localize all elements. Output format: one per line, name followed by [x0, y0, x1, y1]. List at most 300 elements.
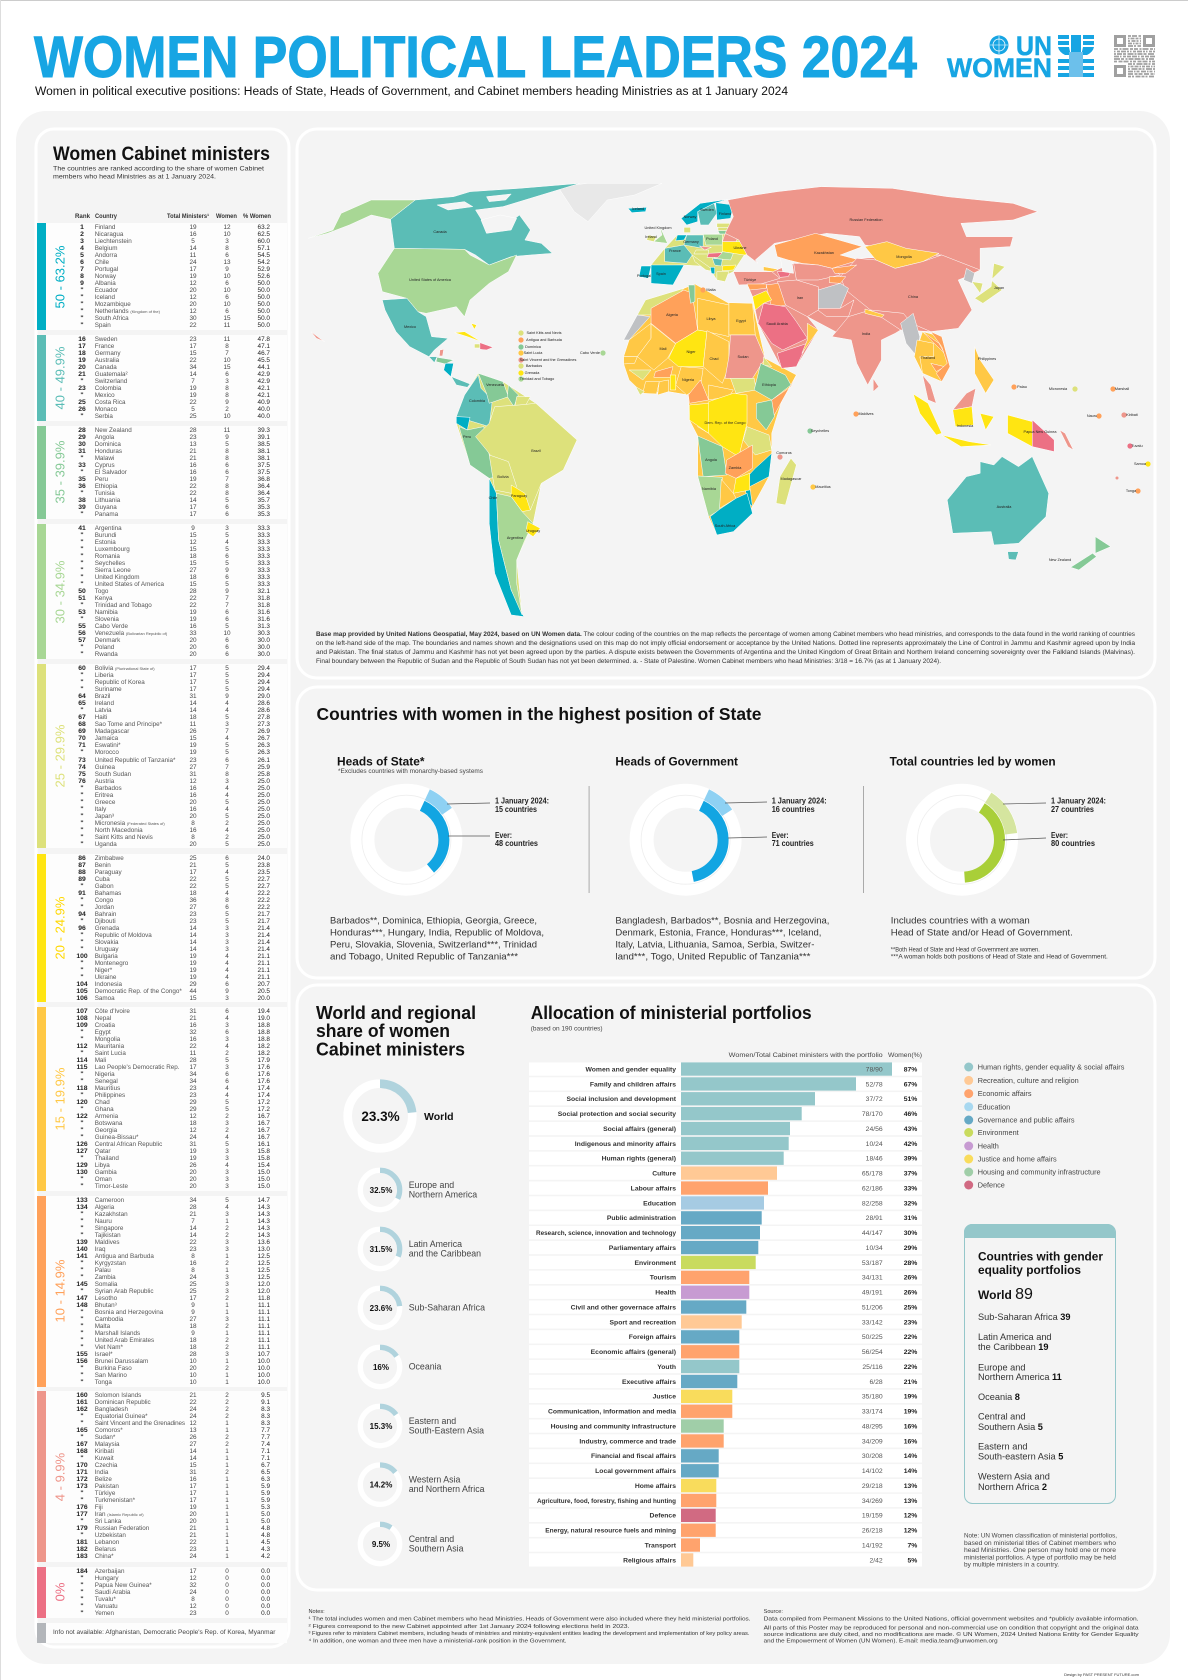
table group: 20 - 24.9%: 21.4 [258, 946, 270, 953]
table group: 15 - 19.9%: 17.6 [258, 1064, 270, 1071]
table group: 50 - 63.2%: Netherlands (Kingdom of the) [95, 308, 160, 315]
table group: 35 - 39.9%: 38.1 [258, 448, 270, 455]
table group: 25 - 29.9%: 29.4 [258, 686, 270, 693]
table group: 15 - 19.9%: 129 [76, 1162, 88, 1169]
table group: 10 - 14.9%: Marshall Islands [95, 1330, 140, 1337]
table group: 10 - 14.9%: 25 [189, 1288, 197, 1295]
table group: 4 - 9.9%: " [80, 1518, 84, 1525]
table group: 25 - 29.9%: 31 [189, 693, 197, 700]
table group: 40 - 49.9%: " [80, 392, 84, 399]
donut: Central and Southern Asia [360, 1524, 464, 1564]
table group: 4 - 9.9%: " [80, 1413, 84, 1420]
table group: 35 - 39.9%: New Zealand [95, 427, 132, 434]
table group: 15 - 19.9%: 6 [225, 1008, 229, 1015]
bar chart: ministerial portfolios: 33/142 [862, 1319, 883, 1326]
map: country labels: Ireland [645, 235, 657, 239]
table group: 10 - 14.9%: 145 [76, 1281, 88, 1288]
bar chart: ministerial portfolios: Health [655, 1290, 676, 1297]
table group: 10 - 14.9%: 11.1 [258, 1309, 270, 1316]
callout: countries with gender equality portfolios: Northern Africa 2 [978, 1482, 1047, 1492]
bar chart: ministerial portfolios: 42% [904, 1141, 917, 1148]
table group: 25 - 29.9%: 3 [225, 778, 229, 785]
table group: 4 - 9.9%: 1 [225, 1476, 229, 1483]
table group: 40 - 49.9%: 14 [189, 371, 197, 378]
table group: 25 - 29.9%: 9 [225, 693, 229, 700]
table group: 20 - 24.9%: 23.5 [258, 869, 270, 876]
table group: 25 - 29.9%: 4 [225, 707, 229, 714]
table group: 25 - 29.9%: Brazil [95, 693, 110, 700]
table group: 0%: 0.0 [261, 1603, 270, 1610]
table group: 40 - 49.9%: Germany [95, 350, 121, 357]
table group: 15 - 19.9%: " [80, 1120, 84, 1127]
table group: 20 - 24.9%: 20.0 [258, 995, 270, 1002]
table group: 25 - 29.9%: Barbados [95, 785, 122, 792]
map: country labels: Ukraine [733, 246, 747, 250]
table group: 4 - 9.9%: 19 [189, 1504, 197, 1511]
bar chart: ministerial portfolios: Civil and other governace affairs [571, 1304, 676, 1311]
table group: 15 - 19.9%: 2 [225, 1113, 229, 1120]
bar chart: ministerial portfolios: 22% [904, 1349, 917, 1356]
bar chart: ministerial portfolios: Energy, natural resource fuels and mining [545, 1528, 676, 1535]
bar chart: ministerial portfolios: Culture [652, 1170, 676, 1178]
table group: 25 - 29.9%: Sao Tome and Principe* [95, 721, 162, 728]
table group: 30 - 34.9%: " [80, 574, 84, 581]
table group: 25 - 29.9%: 71 [78, 742, 86, 749]
table group: 30 - 34.9%: 30.0 [258, 651, 270, 658]
table group: 15 - 19.9%: 15.0 [258, 1176, 270, 1183]
bar chart: ministerial portfolios: Justice [653, 1394, 676, 1401]
table group: 15 - 19.9%: 5 [225, 1057, 229, 1064]
table group: 30 - 34.9%: 53 [78, 609, 86, 616]
table group: 0%: Tuvalu* [95, 1596, 116, 1603]
table group: 20 - 24.9%: 4 [225, 869, 229, 876]
table group: 4 - 9.9%: 9.5 [261, 1392, 270, 1399]
table group: 25 - 29.9%: 5 [225, 841, 229, 848]
table group: 15 - 19.9%: Egypt [95, 1029, 111, 1036]
table group: 20 - 24.9%: 3 [225, 995, 229, 1002]
bar chart: ministerial portfolios: 78/170 [862, 1111, 883, 1118]
table group: 25 - 29.9%: 25.0 [258, 820, 270, 827]
table group: 50 - 63.2%: 10 [223, 287, 231, 294]
table group: 0%: Vanuatu [95, 1603, 118, 1610]
map: country labels: Portugal [637, 274, 651, 278]
table group: 20 - 24.9%: " [80, 918, 84, 925]
table group: 40 - 49.9%: 34 [189, 364, 197, 371]
table group: 10 - 14.9%: Zambia [95, 1274, 116, 1281]
bar chart: ministerial portfolios: 46% [904, 1111, 917, 1118]
table group: 30 - 34.9%: 30.0 [258, 637, 270, 644]
table group: 25 - 29.9%: 16 [189, 792, 197, 799]
table group: 4 - 9.9%: " [80, 1420, 84, 1427]
table group: 4 - 9.9%: 5.9 [261, 1490, 270, 1497]
map: country labels: Dem. Rep. of the Congo [705, 421, 745, 425]
QR code [1114, 35, 1155, 77]
table group: 20 - 24.9%: 88 [78, 869, 86, 876]
table group: 25 - 29.9%: 29.4 [258, 672, 270, 679]
table group: 35 - 39.9%: 16 [189, 469, 197, 476]
table group: 50 - 63.2%: 52.6 [258, 273, 270, 280]
table group: 4 - 9.9%: 24 [189, 1406, 197, 1413]
bar chart: ministerial portfolios: 26/218 [862, 1528, 883, 1535]
table group: 10 - 14.9%: 28 [189, 1204, 197, 1211]
bar chart: ministerial portfolios: 87% [904, 1066, 917, 1073]
table group: 20 - 24.9%: 3 [225, 946, 229, 953]
table group: 4 - 9.9%: 7.4 [261, 1441, 270, 1448]
table group: 35 - 39.9%: 31 [78, 448, 86, 455]
table group: 15 - 19.9%: 22 [189, 1043, 197, 1050]
table group: 4 - 9.9%: 1 [225, 1553, 229, 1560]
table group: 40 - 49.9%: Australia [95, 357, 119, 364]
callout: countries with gender equality portfolios: Northern America 11 [978, 1372, 1062, 1382]
table group: 25 - 29.9%: Bolivia (Plurinational State of) [95, 665, 155, 672]
table group: 10 - 14.9%: 12.0 [258, 1281, 270, 1288]
table group: 40 - 49.9%: 7 [191, 378, 195, 385]
table group: 20 - 24.9%: Slovakia [95, 939, 118, 946]
table group: 35 - 39.9%: 38 [78, 497, 86, 504]
map: country labels: Kazakhstan [814, 251, 834, 255]
table group: 25 - 29.9%: 8 [191, 834, 195, 841]
table group: 4 - 9.9%: 20 [189, 1511, 197, 1518]
table group: 4 - 9.9%: 6.7 [261, 1462, 270, 1469]
table group: 20 - 24.9%: 4 [225, 960, 229, 967]
map: country labels: Namibia [702, 487, 717, 491]
table group: 10 - 14.9%: Cambodia [95, 1316, 123, 1323]
table group: 0%: 0.0 [261, 1589, 270, 1596]
table group: 15 - 19.9%: 18.8 [258, 1022, 270, 1029]
panel: total countries led by women: Total countries led by women [890, 757, 1056, 769]
donut: Central and Southern Asia: 9.5% [372, 1540, 390, 1549]
table group: 20 - 24.9%: 105 [76, 988, 88, 995]
table group: 15 - 19.9%: Armenia [95, 1113, 118, 1120]
bar chart: ministerial portfolios: 43% [904, 1126, 917, 1133]
table group: 10 - 14.9%: Bosnia and Herzegovina [95, 1309, 163, 1316]
bar chart: ministerial portfolios: 14/102 [862, 1468, 883, 1475]
heading: world and regional share: Cabinet ministers [316, 1038, 465, 1060]
table group: 25 - 29.9%: Uganda [95, 841, 117, 848]
table group: 30 - 34.9%: 55 [78, 623, 86, 630]
table group: 30 - 34.9%: 28 [189, 588, 197, 595]
table group: 35 - 39.9%: Dominica [95, 441, 121, 448]
table group: 30 - 34.9%: 31.6 [258, 609, 270, 616]
table group: 4 - 9.9%: 4.8 [261, 1532, 270, 1539]
table group: 4 - 9.9%: 7.1 [261, 1448, 270, 1455]
table group: 35 - 39.9%: Cyprus [95, 462, 115, 469]
table group: 15 - 19.9%: 6 [225, 1078, 229, 1085]
table group: 25 - 29.9%: Liberia [95, 672, 114, 679]
bar chart: ministerial portfolios: 34/131 [862, 1275, 883, 1282]
table group: 15 - 19.9%: Timor-Leste [95, 1183, 128, 1190]
table group: 20 - 24.9%: 6 [225, 855, 229, 862]
table group: 15 - 19.9%: Lao People's Democratic Rep. [95, 1064, 180, 1071]
table group: 20 - 24.9%: 20.5 [258, 988, 270, 995]
table group: 15 - 19.9%: 20 [189, 1183, 197, 1190]
table group: 30 - 34.9%: 9 [225, 567, 229, 574]
table group: 15 - 19.9%: 11 [190, 1050, 196, 1057]
table group: 25 - 29.9%: 2 [225, 820, 229, 827]
callout: countries with gender equality portfolios: equality portfolios [978, 1263, 1081, 1277]
table group: 4 - 9.9%: 2 [225, 1469, 229, 1476]
table group: 30 - 34.9%: 57 [78, 637, 86, 644]
table group: 10 - 14.9%: " [80, 1372, 84, 1379]
map: country labels: Mauritius [815, 485, 831, 489]
table group: 50 - 63.2%: 50.0 [258, 280, 270, 287]
table group: 15 - 19.9%: 32 [189, 1029, 197, 1036]
table group: 4 - 9.9%: 21 [189, 1532, 197, 1539]
table group: 50 - 63.2%: 3 [225, 238, 229, 245]
table group: 30 - 34.9%: 6 [225, 553, 229, 560]
table group: 15 - 19.9%: 2 [225, 1050, 229, 1057]
bar chart: ministerial portfolios: Public administration [607, 1215, 676, 1222]
table group: 10 - 14.9%: Maldives [95, 1239, 120, 1246]
table group: 15 - 19.9%: 17 [189, 1064, 197, 1071]
table group: 10 - 14.9%: 140 [76, 1246, 88, 1253]
table group: 25 - 29.9%: 17 [189, 686, 197, 693]
table group: 15 - 19.9%: 18.2 [258, 1050, 270, 1057]
bar chart: ministerial portfolios: Tourism [650, 1275, 676, 1282]
map: country labels: Colombia [469, 399, 486, 403]
table group: 35 - 39.9%: " [80, 469, 84, 476]
table group: 20 - 24.9%: 87 [78, 862, 86, 869]
table group: 4 - 9.9%: 5.9 [261, 1483, 270, 1490]
panel: total countries led by women: Includes countries with a woman [891, 915, 1030, 925]
table group: 30 - 34.9%: " [80, 553, 84, 560]
table group: 15 - 19.9%: 16.7 [258, 1113, 270, 1120]
table group: 50 - 63.2%: 11 [190, 252, 196, 259]
map: country labels: India [862, 332, 871, 336]
table group: 4 - 9.9%: 16 [189, 1476, 197, 1483]
map: country labels: Chad [709, 357, 719, 361]
panel: heads of government [615, 757, 829, 961]
table group: 25 - 29.9%: Eritrea [95, 792, 113, 799]
table group: 25 - 29.9%: South Sudan [95, 771, 131, 778]
table group: 4 - 9.9%: 17 [189, 1497, 197, 1504]
table group: 25 - 29.9%: " [80, 749, 84, 756]
bar chart: ministerial portfolios: Youth [657, 1364, 676, 1371]
table group: 35 - 39.9%: 11 [224, 427, 230, 434]
table group: 4 - 9.9%: Fiji [95, 1504, 103, 1511]
table group: 30 - 34.9%: 6 [225, 651, 229, 658]
table group: 50 - 63.2%: " [80, 301, 84, 308]
table group: 25 - 29.9%: 4 [225, 735, 229, 742]
table group: 25 - 29.9%: 26.3 [258, 749, 270, 756]
table group: 30 - 34.9%: 7 [225, 595, 229, 602]
donut: Europe and Northern America: 32.5% [370, 1186, 392, 1195]
table group: 10 - 14.9%: 11.1 [258, 1344, 270, 1351]
donut: Europe and Northern America: Europe and [409, 1180, 454, 1190]
table group: 4 - 9.9%: 2 [225, 1399, 229, 1406]
table group: 10 - 14.9%: 5 [225, 1197, 229, 1204]
table group: 4 - 9.9%: 183 [76, 1553, 88, 1560]
table group: 4 - 9.9%: China* [95, 1553, 114, 1560]
table group: 35 - 39.9%: 8 [225, 483, 229, 490]
table group: 20 - 24.9%: Congo [95, 897, 113, 904]
table group: 4 - 9.9%: 14 [189, 1448, 197, 1455]
bar chart: ministerial portfolios: 48/295 [862, 1423, 883, 1430]
bar chart: ministerial portfolios: 25/116 [862, 1364, 883, 1371]
bar chart: ministerial portfolios: Industry, commerce and trade [579, 1438, 676, 1445]
table group: 4 - 9.9%: " [80, 1532, 84, 1539]
map: country labels: Sudan [738, 355, 748, 359]
legend: portfolio categories [964, 1062, 1125, 1190]
callout: countries with gender equality portfolios: Eastern and [978, 1442, 1028, 1452]
table group: 15 - 19.9%: 19 [189, 1148, 197, 1155]
table group: 50 - 63.2%: 50.0 [258, 315, 270, 322]
table group: 25 - 29.9%: United Republic of Tanzania* [95, 756, 175, 764]
table group: 25 - 29.9%: 19 [189, 742, 197, 749]
table group: 0%: 0.0 [261, 1568, 270, 1575]
table group: 10 - 14.9%: 22 [189, 1239, 197, 1246]
bar chart: ministerial portfolios: 29/218 [862, 1483, 883, 1490]
table group: 40 - 49.9%: 23 [78, 385, 86, 392]
table group: 10 - 14.9%: 156 [76, 1358, 88, 1365]
bar chart: ministerial portfolios: Family and children affairs [590, 1081, 676, 1088]
map: country labels: Nigeria [682, 378, 695, 382]
table group: 40 - 49.9%: 22 [189, 399, 197, 406]
table group: 10 - 14.9%: 10.0 [258, 1358, 270, 1365]
table group: 30 - 34.9%: 9 [191, 525, 195, 532]
table group: 20 - 24.9%: 4 [225, 890, 229, 897]
table group: 4 - 9.9%: Czechia [95, 1462, 117, 1469]
table group: 50 - 63.2%: 62.5 [258, 231, 270, 238]
bar chart: ministerial portfolios: 24/56 [866, 1126, 883, 1133]
bar chart: ministerial portfolios: 7% [907, 1542, 917, 1549]
table group: 0%: 0 [225, 1568, 229, 1575]
table group: 35 - 39.9%: 33 [78, 462, 86, 469]
table group: 35 - 39.9%: 36.4 [258, 490, 270, 497]
table group: 15 - 19.9%: 16.7 [258, 1134, 270, 1141]
table group: 10 - 14.9%: 18 [189, 1323, 197, 1330]
table group: 20 - 24.9%: 89 [78, 876, 86, 883]
callout: countries with gender equality portfolios: Europe and [978, 1362, 1026, 1372]
table group: 30 - 34.9%: 5 [225, 532, 229, 539]
table group: 50 - 63.2%: 6 [225, 252, 229, 259]
bar chart: ministerial portfolios: 14/192 [862, 1542, 883, 1549]
table group: 20 - 24.9%: 14 [189, 946, 197, 953]
table group: 0%: 12 [189, 1603, 197, 1610]
table group: 30 - 34.9%: 18 [189, 574, 197, 581]
table group: 25 - 29.9%: 67 [78, 714, 86, 721]
table group: 30 - 34.9%: Sierra Leone [95, 567, 131, 574]
table group: 30 - 34.9%: 6 [225, 609, 229, 616]
table group: 50 - 63.2%: " [80, 308, 84, 315]
table group: 10 - 14.9%: 9 [191, 1330, 195, 1337]
table group: 20 - 24.9%: 20 - 24.9% [52, 896, 68, 959]
table group: 15 - 19.9%: 18.8 [258, 1036, 270, 1043]
table group: 25 - 29.9%: 17 [189, 665, 197, 672]
table group: 0%: 0.0 [261, 1596, 270, 1603]
table group: 50 - 63.2% [37, 223, 287, 330]
table group: 10 - 14.9%: 1 [225, 1330, 229, 1337]
table group: 15 - 19.9%: 112 [77, 1043, 87, 1050]
bar chart: ministerial portfolios: Social inclusion and development [566, 1096, 677, 1103]
bar chart: ministerial portfolios: 13% [904, 1498, 917, 1505]
table group: 20 - 24.9%: 19 [189, 967, 197, 974]
table group: 10 - 14.9%: " [80, 1316, 84, 1323]
table group: 25 - 29.9%: 5 [225, 749, 229, 756]
footer notes: ⁴ In addition, one woman and three men have a ministerial-rank position in the Government. [308, 1638, 567, 1644]
table group: 20 - 24.9%: 9 [225, 988, 229, 995]
table group: 50 - 63.2%: Mozambique [95, 301, 131, 308]
table group: 10 - 14.9%: 3 [225, 1316, 229, 1323]
donut: Central and Southern Asia: Southern Asia [409, 1544, 464, 1554]
footer notes [308, 1609, 751, 1644]
map: country labels: Seychelles [811, 429, 829, 433]
callout: countries with gender equality portfolios: World 89 [978, 1286, 1033, 1303]
table group: 20 - 24.9%: 94 [78, 911, 86, 918]
table group: 40 - 49.9%: 42.1 [258, 385, 270, 392]
table group: 15 - 19.9%: " [80, 1029, 84, 1036]
table group: 15 - 19.9%: 28 [189, 1057, 197, 1064]
table group: 20 - 24.9%: 21.4 [258, 939, 270, 946]
panel: heads of state: Peru, Slovakia, Slovenia, Switzerland***, Trinidad [330, 939, 537, 949]
credit: Design by PAST PRESENT FUTURE.com [1064, 1672, 1140, 1677]
table group: 40 - 49.9%: 46.7 [258, 350, 270, 357]
table group: 30 - 34.9%: 22 [189, 595, 197, 602]
UN Women logo [947, 31, 1094, 83]
table group: 10 - 14.9%: United Arab Emirates [95, 1337, 154, 1344]
table group: 15 - 19.9%: 19.0 [258, 1015, 270, 1022]
table group: 15 - 19.9%: 3 [225, 1183, 229, 1190]
map: country labels: Brazil [531, 449, 541, 453]
table group: 40 - 49.9%: Switzerland [95, 378, 127, 385]
table group: 0%: " [80, 1596, 84, 1603]
table group: 30 - 34.9%: 51 [78, 595, 86, 602]
bar chart: ministerial portfolios: 19% [904, 1394, 917, 1401]
table header: Total Ministers¹ [167, 213, 209, 220]
table group: 35 - 39.9%: 39.1 [258, 434, 270, 441]
table group: 20 - 24.9%: 5 [225, 876, 229, 883]
map: country labels: Barbados [526, 364, 542, 368]
table group: 10 - 14.9%: Syrian Arab Republic [95, 1288, 154, 1295]
map: country labels: Bolivia [497, 475, 509, 479]
bar chart: ministerial portfolios: 12% [904, 1513, 917, 1520]
table group: 20 - 24.9%: 23 [189, 918, 197, 925]
table group: 10 - 14.9%: " [80, 1365, 84, 1372]
table group: 10 - 14.9%: 1 [225, 1302, 229, 1309]
UN Women logo: WOMEN [947, 53, 1052, 83]
table group: 10 - 14.9%: 139 [76, 1239, 88, 1246]
callout: countries with gender equality portfolios: Western Asia and [978, 1472, 1050, 1482]
table group: 10 - 14.9%: Israel* [95, 1351, 113, 1358]
table group: 25 - 29.9%: Latvia [95, 707, 112, 714]
table group: 10 - 14.9%: " [80, 1225, 84, 1232]
table group: 15 - 19.9%: 122 [76, 1113, 88, 1120]
panel: heads of government: 71 countries [772, 839, 814, 848]
table group: 4 - 9.9%: " [80, 1497, 84, 1504]
panel: women cabinet ministers heading: The countries are ranked according to the share of women Cabinet [53, 166, 264, 173]
table group: 30 - 34.9%: 33.3 [258, 553, 270, 560]
table group: 4 - 9.9%: Russian Federation [95, 1525, 149, 1532]
table group: 10 - 14.9%: Tonga [95, 1379, 112, 1386]
table group: 35 - 39.9%: 8 [225, 448, 229, 455]
callout: countries with gender equality portfolios: Countries with gender [978, 1250, 1103, 1264]
table group: 15 - 19.9%: 3 [225, 1155, 229, 1162]
table group: 40 - 49.9%: 6 [225, 371, 229, 378]
table group: 15 - 19.9%: 12 [189, 1113, 197, 1120]
table group: 10 - 14.9%: 8 [191, 1253, 195, 1260]
table group: 30 - 34.9%: 20 [189, 644, 197, 651]
table group: 15 - 19.9%: 15 - 19.9% [52, 1067, 68, 1130]
table group: 30 - 34.9%: " [80, 644, 84, 651]
table group: 50 - 63.2%: 16 [189, 231, 197, 238]
table group: 25 - 29.9%: 19 [189, 749, 197, 756]
table group: 15 - 19.9%: 17.2 [258, 1099, 270, 1106]
table group: 25 - 29.9%: 3 [225, 721, 229, 728]
bar chart: ministerial portfolios: 14% [904, 1453, 917, 1460]
table group: 35 - 39.9%: 6 [225, 511, 229, 518]
table group: 10 - 14.9%: 7 [191, 1218, 195, 1225]
panel: total countries led by women: Ever: [1051, 831, 1068, 840]
